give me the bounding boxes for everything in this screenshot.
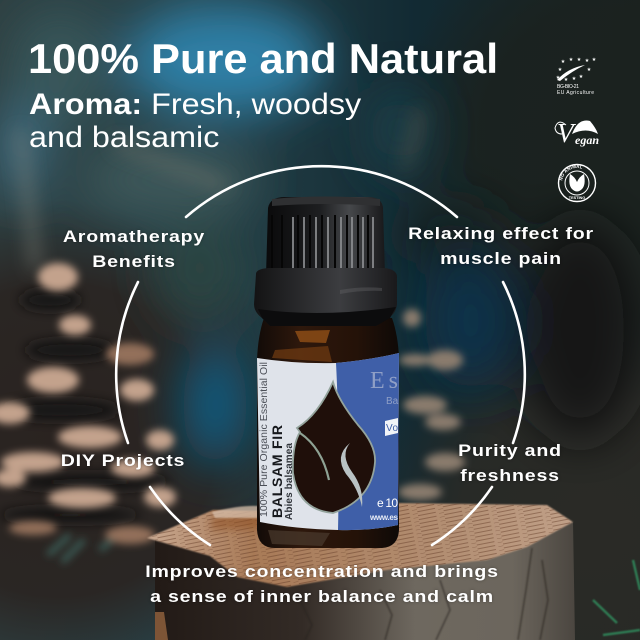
- icon: vegan mark: [555, 118, 599, 148]
- label: concentration and balance: Improves concentration and brings: [145, 562, 499, 581]
- icon: no animal testing: [558, 164, 596, 202]
- icon: bottle of balsam fir essential oil: Es: [370, 368, 398, 394]
- label: relaxing effect: muscle pain: [440, 248, 562, 268]
- aroma description: and balsamic: [29, 121, 219, 154]
- label: purity and freshness: [458, 441, 562, 484]
- icon: bottle of balsam fir essential oil: e 10: [377, 496, 398, 510]
- label: purity and freshness: Purity and: [458, 441, 562, 460]
- label: relaxing effect: [408, 224, 594, 268]
- icon: bottle of balsam fir essential oil: Abies balsamea: [284, 443, 295, 520]
- icon: bottle of balsam fir essential oil: BALSAM FIR: [269, 425, 285, 518]
- aroma description: [29, 88, 362, 154]
- circular ring of arcs around bottle: [116, 166, 525, 545]
- icon: no animal testing: TESTING: [569, 196, 585, 200]
- bottle cap: [266, 197, 385, 275]
- icon: EU organic leaf: EU Agriculture: [557, 90, 594, 96]
- icon: EU organic leaf: ★: [558, 67, 563, 73]
- icon: EU organic leaf: ★: [561, 59, 566, 65]
- icon: EU organic leaf: ★: [585, 58, 590, 64]
- icon: EU organic leaf: ★: [556, 75, 561, 81]
- label text: 100% Pure Organic Essential Oil: [258, 362, 270, 517]
- icon: bottle of balsam fir essential oil: Vo: [386, 423, 398, 434]
- label: aromatherapy benefits: [63, 227, 205, 270]
- label: purity and freshness: freshness: [460, 466, 560, 484]
- icon: EU organic leaf: ★: [564, 77, 569, 83]
- icon: bottle of balsam fir essential oil: [254, 196, 399, 548]
- icon: vegan mark: egan: [575, 133, 599, 147]
- icon: no animal testing: NO ANIMAL: [560, 165, 582, 180]
- icon: EU organic leaf: ★: [577, 57, 582, 63]
- label: aromatherapy benefits: Benefits: [92, 252, 176, 270]
- icon: vegan mark: V: [557, 118, 577, 148]
- icon: EU organic leaf: ★: [579, 74, 584, 80]
- icon: bottle of balsam fir essential oil: Ba: [386, 396, 399, 407]
- stump cut surface: [147, 503, 573, 587]
- label: aromatherapy benefits: Aromatherapy: [63, 227, 205, 246]
- icon: EU organic leaf: ★: [592, 57, 597, 63]
- tree stump: [147, 503, 575, 640]
- icon: EU organic leaf: ★: [569, 57, 574, 63]
- icon: EU organic leaf: [556, 57, 597, 96]
- label drop: [293, 382, 375, 513]
- icon: bottle of balsam fir essential oil: www.es: [369, 513, 399, 522]
- label: relaxing effect: Relaxing effect for: [408, 224, 594, 243]
- icon: EU organic leaf: ★: [572, 76, 577, 82]
- label: DIY projects: DIY Projects: [61, 451, 185, 470]
- aroma description: Aroma: Fresh, woodsy: [29, 88, 361, 121]
- bottle glass: [257, 318, 399, 548]
- green needles: [593, 560, 640, 635]
- icon: EU organic leaf: ★: [587, 67, 592, 73]
- label: concentration and balance: a sense of inner balance and calm: [150, 586, 494, 606]
- label: concentration and balance: [145, 562, 499, 606]
- icon: EU organic leaf: BG-BIO-21: [557, 84, 579, 90]
- stump bark: [155, 522, 575, 640]
- title: 100% Pure and Natural: [28, 35, 498, 82]
- bottle label: [257, 353, 399, 530]
